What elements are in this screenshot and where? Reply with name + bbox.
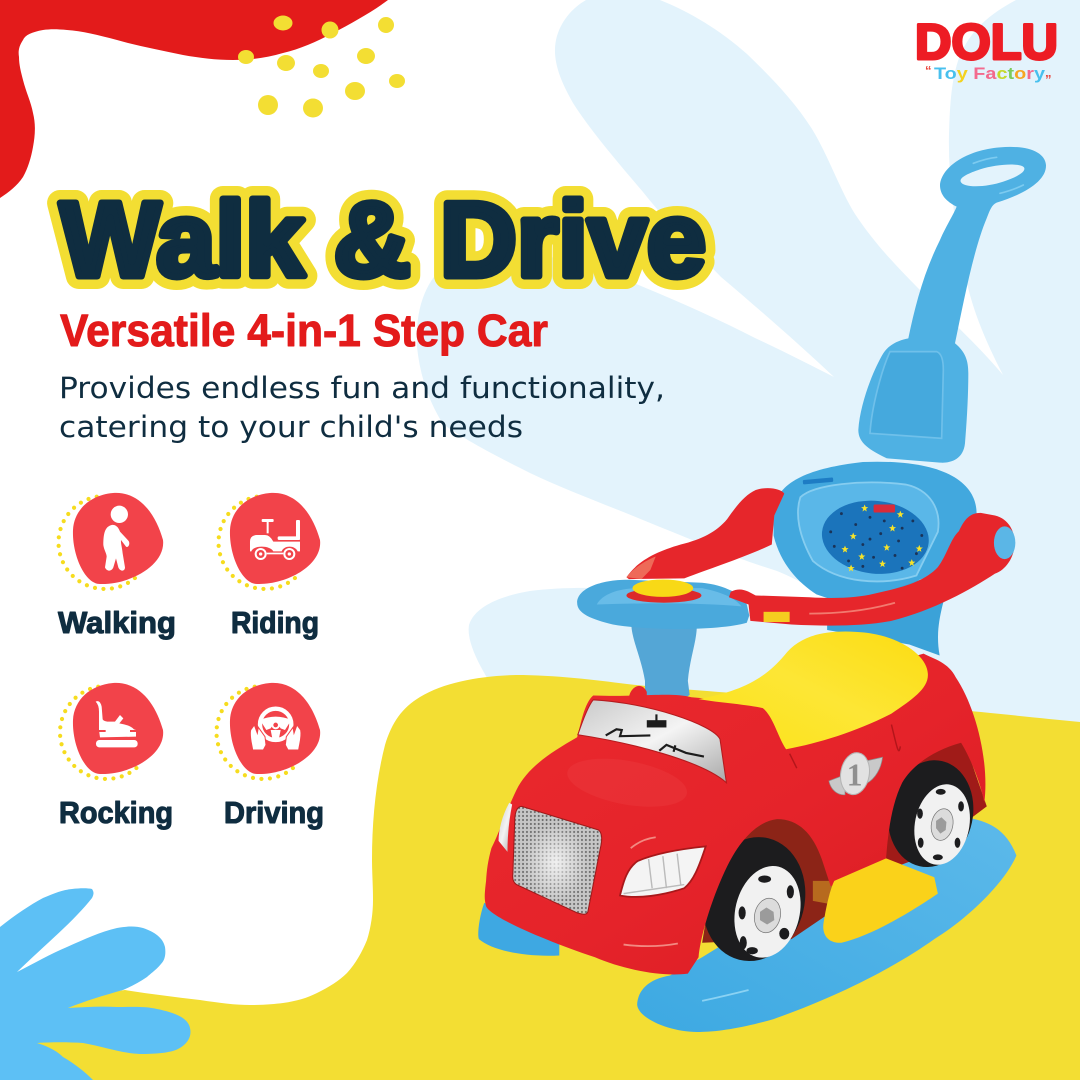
title: Walk & Drive: Walk & Drive xyxy=(60,181,706,299)
icon: rocking seat badge xyxy=(60,683,163,779)
car body xyxy=(485,654,985,974)
front rocker foot xyxy=(478,903,559,956)
horn button xyxy=(626,588,701,603)
decoration: yellow dots xyxy=(238,16,405,118)
feature: riding xyxy=(219,493,320,640)
background: yellow floor blob xyxy=(20,675,1080,1080)
steering wheel ring xyxy=(577,580,749,629)
decoration: red corner blob xyxy=(0,0,388,198)
steering column xyxy=(631,626,697,702)
grille xyxy=(513,806,602,914)
feature: driving xyxy=(217,683,324,830)
logo: Dolu Toy Factory: Toy Factory xyxy=(934,64,1046,83)
front wheel xyxy=(690,826,818,972)
right red arm xyxy=(729,513,1015,626)
icon: ride-on car badge xyxy=(219,493,320,589)
number one badge xyxy=(829,750,882,797)
feature: walking xyxy=(58,493,176,640)
seat xyxy=(699,632,928,749)
description text: catering to your child's needs xyxy=(59,410,523,444)
speaker panel with stars xyxy=(818,495,932,579)
description text: Provides endless fun and functionality, xyxy=(59,371,665,405)
decoration: blue splash xyxy=(0,888,190,1080)
product: 4-in-1 step car xyxy=(478,147,1046,1032)
number one badge: 1 xyxy=(847,757,862,793)
right headlight xyxy=(620,846,706,897)
seat back pillar xyxy=(827,575,950,655)
label: Driving: Driving xyxy=(224,795,324,830)
logo: Dolu Toy Factory: ” xyxy=(1045,72,1052,87)
logo: Dolu Toy Factory: “ xyxy=(925,63,932,78)
subtitle: Versatile 4-in-1 Step Car xyxy=(60,305,548,356)
wheel arch interior xyxy=(702,810,840,943)
yellow foot step xyxy=(823,858,938,943)
seat back xyxy=(774,462,977,598)
windshield xyxy=(578,700,726,783)
icon: steering wheel badge xyxy=(217,683,320,779)
label: Rocking: Rocking xyxy=(59,795,173,830)
push handle xyxy=(858,147,1046,463)
body crease xyxy=(790,725,900,768)
rear wheel xyxy=(878,752,983,875)
left headlight xyxy=(499,803,512,852)
label: Riding: Riding xyxy=(231,605,319,640)
rear rocker base xyxy=(637,817,1016,1032)
hood knob behind column xyxy=(629,686,647,703)
title: Walk & Drive: Walk & Drive xyxy=(60,181,706,299)
background: light blue shapes xyxy=(417,0,1080,730)
left red arm xyxy=(626,488,784,579)
description text xyxy=(59,371,665,444)
icon: walking figure badge xyxy=(59,493,163,589)
feature: rocking xyxy=(59,683,173,830)
logo: Dolu Toy Factory: DOLU xyxy=(915,14,1058,70)
label: Walking: Walking xyxy=(58,605,176,640)
